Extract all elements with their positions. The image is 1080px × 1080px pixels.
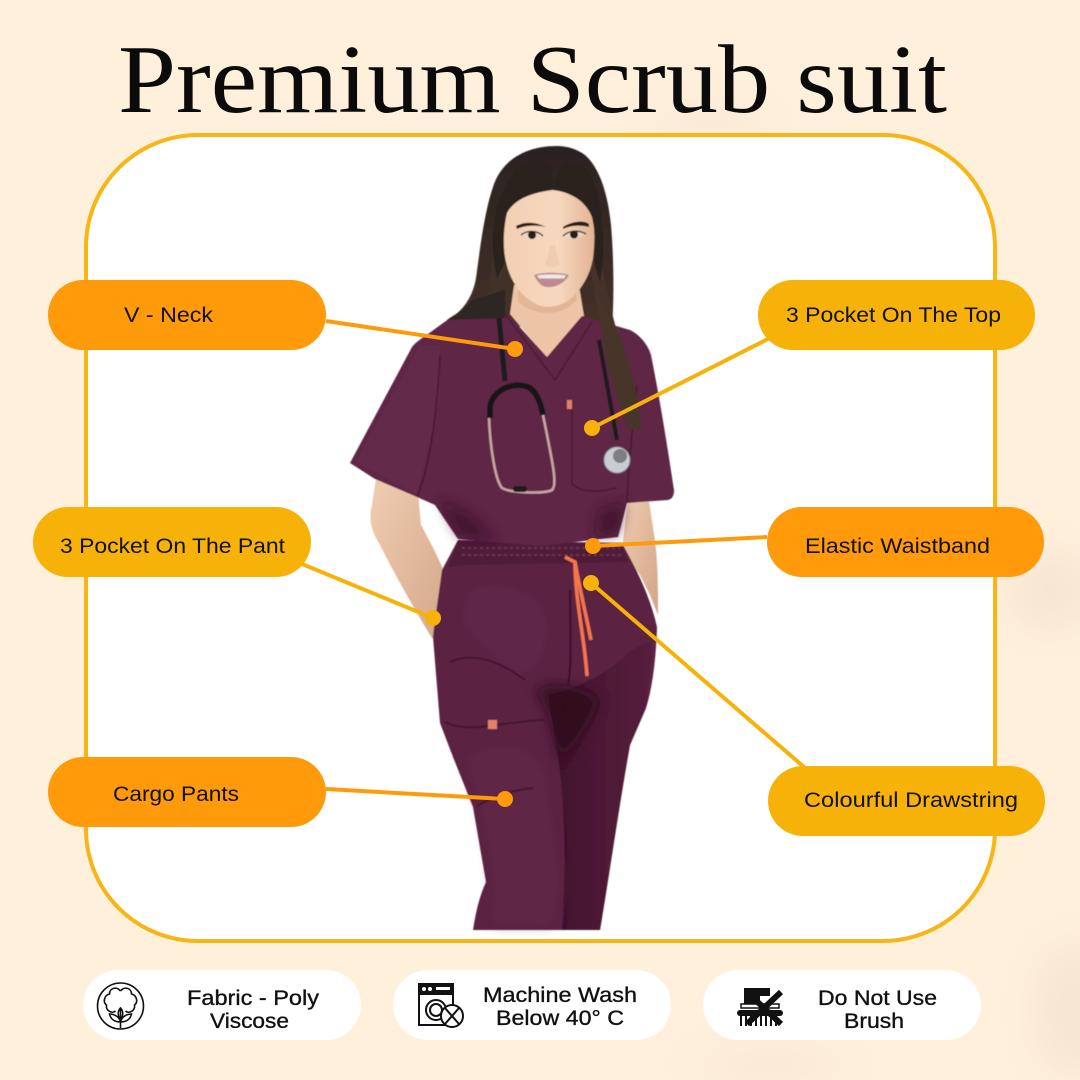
icon: crossed brush <box>737 988 783 1026</box>
care badge: no brush: Do Not Use <box>818 986 937 1010</box>
panel: product frame <box>86 135 995 941</box>
nose <box>545 245 560 267</box>
hair front strands <box>493 160 553 278</box>
right leg shade <box>548 640 653 930</box>
face <box>504 190 594 307</box>
mouth <box>534 273 569 287</box>
chest pocket <box>572 400 617 491</box>
icon: cotton <box>98 983 144 1029</box>
dark crotch fold <box>535 686 600 760</box>
care badge: machine wash: Machine Wash <box>483 983 637 1007</box>
callout: Colourful Drawstring <box>583 575 1045 836</box>
hidden fly <box>568 590 570 685</box>
pants <box>433 540 657 930</box>
care badge: machine wash <box>393 970 671 1040</box>
callout: Colourful Drawstring: Colourful Drawstring <box>804 788 1018 812</box>
care badge: machine wash: Below 40° C <box>496 1006 624 1030</box>
callout: 3 Pocket On The Pant: 3 Pocket On The Pant <box>60 534 285 558</box>
waistband <box>448 541 628 567</box>
hair back <box>447 146 640 432</box>
callout: 3 Pocket On The Top: 3 Pocket On The Top <box>786 303 1001 327</box>
chest piece <box>604 447 630 473</box>
right arm <box>622 495 658 615</box>
shirt <box>350 313 674 546</box>
eyes <box>521 230 586 239</box>
callout: 3 Pocket On The Top <box>584 280 1035 436</box>
callout: Elastic Waistband: Elastic Waistband <box>805 534 990 558</box>
hair over shoulder <box>594 290 642 430</box>
care badge: no brush: Brush <box>844 1009 904 1033</box>
pocket label <box>488 720 497 729</box>
callout: 3 Pocket On The Pant <box>33 507 441 626</box>
callout: V - Neck <box>48 280 523 357</box>
callout: Cargo Pants: Cargo Pants <box>113 782 239 806</box>
title: Premium Scrub suit <box>118 26 947 134</box>
care badge: no brush <box>703 970 981 1040</box>
callout: Elastic Waistband <box>585 507 1044 577</box>
collar <box>505 314 592 380</box>
callout: Cargo Pants <box>48 757 513 827</box>
care badge: fabric <box>83 970 361 1040</box>
chest logo <box>567 400 572 409</box>
care badge: fabric: Fabric - Poly <box>187 986 319 1010</box>
left arm <box>370 478 453 650</box>
eyebrows <box>516 223 546 229</box>
drawstring <box>565 557 591 676</box>
stethoscope <box>489 318 630 492</box>
sleeve and chest shading <box>355 345 440 495</box>
light thigh <box>462 586 546 675</box>
icon: washing machine <box>419 984 463 1027</box>
figure: woman in scrub suit <box>350 146 674 930</box>
thigh folds <box>445 658 545 806</box>
callout: V - Neck: V - Neck <box>124 303 213 327</box>
care badge: fabric: Viscose <box>210 1009 289 1033</box>
neck <box>510 280 584 358</box>
